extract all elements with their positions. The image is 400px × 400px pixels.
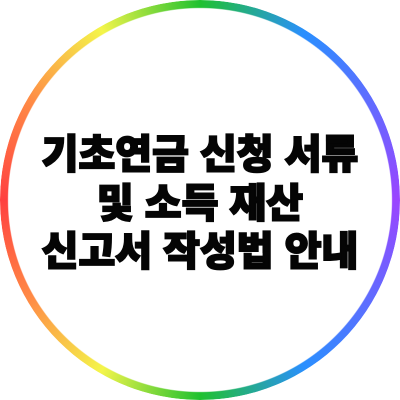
- title: [41, 133, 358, 274]
- title: 및 소득 재산: [97, 182, 303, 226]
- title: 신고서 작성법 안내: [42, 230, 358, 274]
- title: 기초연금 신청 서류: [42, 133, 358, 177]
